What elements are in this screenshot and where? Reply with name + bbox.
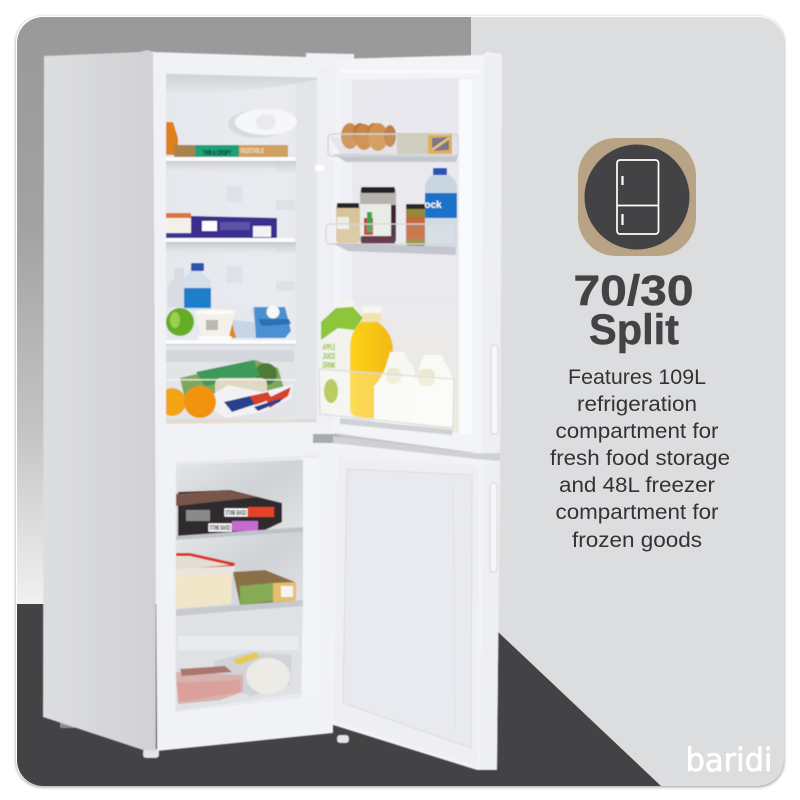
description text bbox=[550, 365, 730, 552]
description text: compartment for bbox=[556, 419, 718, 443]
refrigerator compartment bbox=[165, 73, 324, 424]
fridge side panel bbox=[43, 50, 156, 751]
description text: fresh food storage bbox=[550, 446, 730, 470]
lower door bbox=[330, 436, 500, 770]
bottom door basket bbox=[319, 298, 454, 435]
freezer drawer 1 bbox=[176, 460, 303, 540]
description text: compartment for bbox=[556, 500, 718, 524]
heading: Split bbox=[589, 306, 679, 354]
lower shelf items bbox=[166, 263, 291, 340]
lower shelf bbox=[166, 340, 296, 344]
top shelf bbox=[166, 157, 296, 161]
top shelf items bbox=[166, 122, 288, 157]
fridge front frame bbox=[153, 52, 354, 751]
freezer drawer 1: STONE BAKED bbox=[226, 510, 246, 517]
floor bbox=[17, 604, 784, 786]
bottom door basket: DRINK bbox=[322, 361, 336, 370]
freezer drawer 1: STONE BAKED bbox=[210, 525, 230, 532]
door handle bbox=[490, 483, 497, 572]
refrigerator photo bbox=[43, 50, 502, 770]
freezer drawer 3 bbox=[176, 606, 303, 711]
middle door basket: ock bbox=[424, 200, 442, 211]
door hinge bbox=[313, 434, 352, 443]
heading: 70/30 bbox=[574, 267, 694, 315]
freezer compartment bbox=[160, 422, 333, 712]
thermostat light unit bbox=[228, 109, 297, 138]
heading bbox=[574, 267, 694, 354]
shelf rails bbox=[226, 162, 295, 291]
freezer drawer 2 bbox=[176, 532, 303, 616]
description text: refrigeration bbox=[577, 392, 697, 416]
shelf shadows bbox=[166, 160, 296, 175]
fridge feet bbox=[60, 722, 349, 758]
right diagonal panel bbox=[471, 17, 784, 786]
back wall bbox=[17, 17, 477, 607]
description text: frozen goods bbox=[572, 528, 702, 552]
icon: fridge badge bbox=[578, 138, 696, 256]
middle shelf items bbox=[166, 213, 277, 238]
upper door bbox=[319, 52, 502, 453]
door gasket bbox=[333, 436, 500, 461]
icon: fridge outline bbox=[617, 160, 658, 234]
bottom door basket: APPLE bbox=[322, 343, 336, 352]
top door basket bbox=[328, 123, 458, 162]
top shelf items: VEGETABLE bbox=[240, 148, 264, 155]
description text: Features 109L bbox=[568, 365, 706, 389]
logo: baridi bbox=[686, 741, 772, 779]
bottom door basket: JUICE bbox=[322, 352, 336, 361]
door handle bbox=[491, 345, 498, 434]
top shelf items: THIN & CRISPY bbox=[203, 150, 231, 157]
crisper drawer bbox=[158, 345, 298, 421]
description text: and 48L freezer bbox=[559, 473, 715, 497]
middle door basket bbox=[326, 168, 457, 255]
middle shelf bbox=[166, 238, 295, 242]
